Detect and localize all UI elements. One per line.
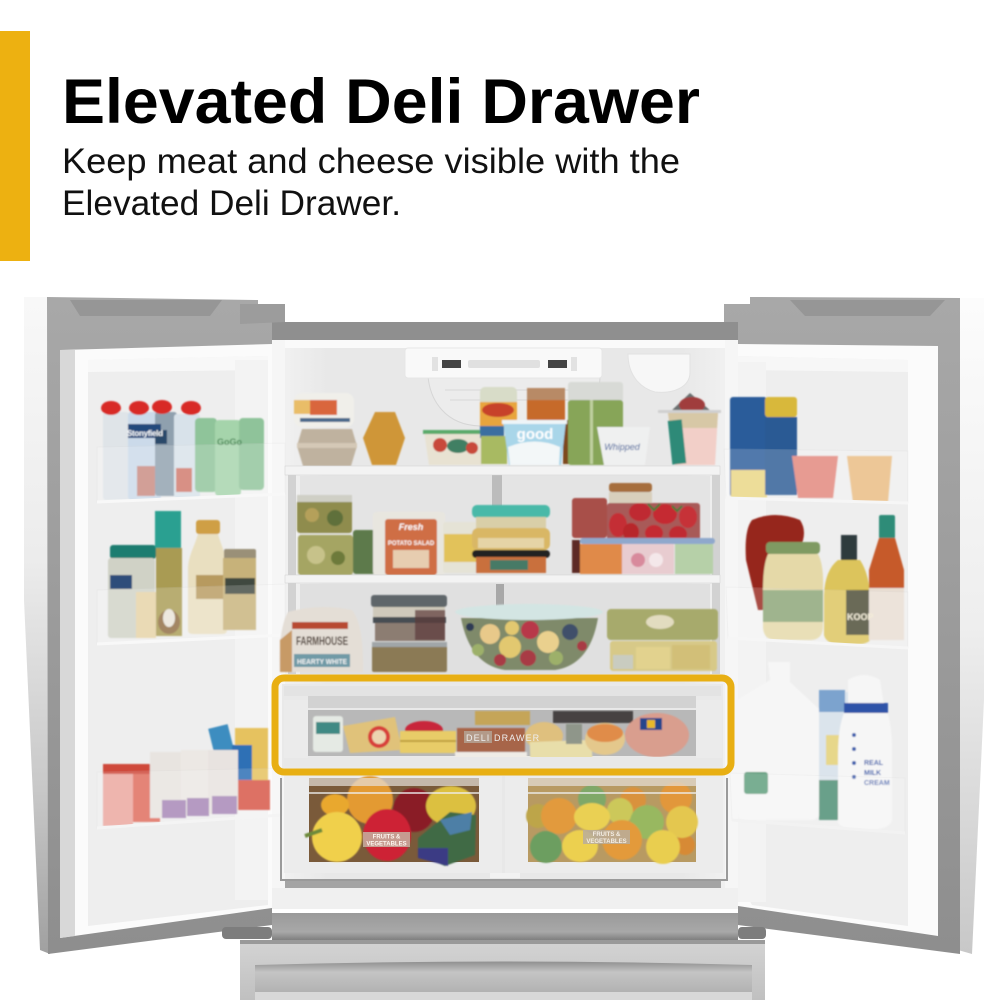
door frame xyxy=(47,297,272,954)
fruit bowl xyxy=(455,604,603,670)
fruits and vegetables label: VEGETABLES xyxy=(366,842,407,848)
milk and creamer xyxy=(737,662,892,830)
right door xyxy=(724,297,984,954)
subtitle: Elevated Deli Drawer. xyxy=(62,184,401,223)
sauces: KOOP xyxy=(847,612,874,622)
fruits and vegetables label xyxy=(363,832,410,848)
door liner xyxy=(88,356,268,926)
whipped tub: Whipped xyxy=(604,442,641,452)
yellow accent bar xyxy=(0,31,30,261)
citrus xyxy=(526,782,698,864)
water filter housing xyxy=(628,354,690,392)
middle shelf items xyxy=(297,483,715,575)
right crisper drawer xyxy=(505,776,723,873)
top shelf items xyxy=(294,382,721,466)
deli food xyxy=(313,711,689,762)
good tub xyxy=(502,420,567,465)
farmhouse bread: FARMHOUSE xyxy=(296,634,348,648)
veggie containers xyxy=(580,538,715,574)
refrigerator body: center cavity xyxy=(272,322,738,912)
pouches: GoGo xyxy=(217,437,242,447)
drawer rail and lower band xyxy=(272,778,738,940)
left door bins xyxy=(97,443,285,828)
squash xyxy=(363,412,405,465)
potato salad tub: Fresh xyxy=(399,522,424,532)
farmhouse bread: HEARTY WHITE xyxy=(297,659,347,666)
door gasket xyxy=(738,344,938,936)
milk and creamer: MILK xyxy=(864,770,881,777)
farmhouse bread xyxy=(280,607,363,672)
potato salad tub: POTATO SALAD xyxy=(388,541,435,547)
door gasket xyxy=(60,344,272,938)
pasta containers xyxy=(297,495,377,575)
title: Elevated Deli Drawer xyxy=(62,67,700,137)
lower shelf items xyxy=(280,595,718,672)
fruits and vegetables label: VEGETABLES xyxy=(586,839,627,845)
refrigerator xyxy=(24,297,984,1000)
left door xyxy=(24,297,285,954)
jars and strawberries xyxy=(572,483,700,573)
door outer edge xyxy=(958,298,984,954)
tub with green lid xyxy=(423,430,487,465)
right door items xyxy=(730,397,904,830)
whipped tub xyxy=(597,427,650,465)
produce xyxy=(305,776,476,866)
door outer edge xyxy=(24,297,50,954)
fruits and vegetables label: FRUITS & xyxy=(373,834,401,840)
parfait cup xyxy=(658,393,721,465)
salsa jar and pickle jar xyxy=(480,382,623,465)
pouches: Stonyfield xyxy=(127,429,163,438)
good tub: good xyxy=(517,426,553,443)
deli drawer xyxy=(282,684,723,768)
storage containers xyxy=(371,595,447,672)
control panel xyxy=(405,348,602,426)
potato salad tub xyxy=(373,512,445,575)
subtitle xyxy=(62,142,680,223)
fruits and vegetables label: FRUITS & xyxy=(593,832,621,838)
subtitle: Keep meat and cheese visible with the xyxy=(62,142,680,181)
fruits and vegetables label xyxy=(583,830,630,845)
door liner xyxy=(738,356,908,926)
milk and creamer: CREAM xyxy=(864,780,890,787)
pouches xyxy=(101,400,264,500)
freezer drawer with handle xyxy=(240,940,765,1000)
stacked tubs xyxy=(472,505,550,573)
sauces xyxy=(746,515,904,645)
pasta boxes xyxy=(607,609,718,671)
cans and cups xyxy=(730,397,892,502)
small tub xyxy=(443,522,477,573)
middle shelf xyxy=(285,575,720,583)
left crisper drawer xyxy=(284,776,502,873)
bread loaf and egg carton xyxy=(294,393,357,466)
right door bins xyxy=(724,449,908,833)
door hinges xyxy=(222,927,766,939)
highlight frame xyxy=(275,678,731,772)
drawer label: DELI DRAWER xyxy=(466,733,540,743)
upper shelf xyxy=(285,466,720,475)
milk and creamer: REAL xyxy=(864,760,884,767)
cartons and snacks xyxy=(103,724,270,826)
condiment jars xyxy=(108,511,256,638)
door frame xyxy=(724,297,960,954)
left door items xyxy=(101,400,270,826)
